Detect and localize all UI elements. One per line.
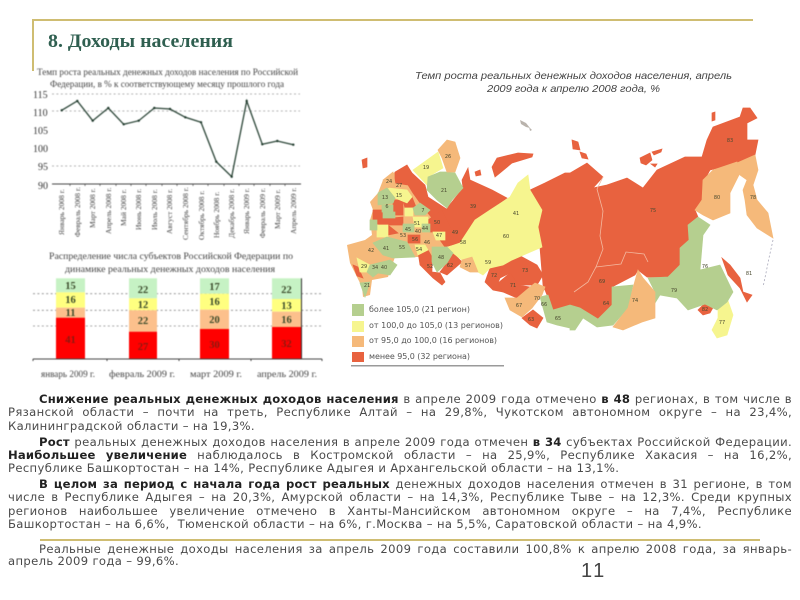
bar: April 2009: 16 [281, 315, 292, 326]
map: region numbers: 21 [441, 188, 447, 194]
y axis labels: 90 [38, 181, 48, 192]
body text: Калининградской области – на 19,3%. [8, 419, 255, 433]
map: region numbers: 69 [599, 279, 605, 285]
month labels: Май 2008 г. [119, 189, 128, 226]
paragraph: income decline [8, 392, 792, 433]
paragraph: income growth [8, 435, 792, 475]
map: region numbers: 47 [436, 233, 442, 239]
map: region numbers: 73 [522, 268, 528, 274]
line chart heading: Темп роста реальных денежных доходов населения по Российской [37, 67, 298, 77]
legend: below 95: менее 95,0 (32 региона) [369, 352, 470, 361]
map: region numbers [361, 138, 756, 326]
map: region numbers: 77 [719, 320, 725, 326]
map: region numbers: 46 [424, 240, 430, 246]
data line [60, 100, 294, 178]
y axis labels: 115 [33, 90, 48, 101]
map: region numbers: 26 [445, 154, 451, 160]
title: 8. Доходы населения [48, 31, 233, 52]
map: region numbers: 15 [396, 193, 402, 199]
map: region numbers: 52 [427, 264, 433, 270]
map: region numbers: 27 [396, 183, 402, 189]
map: region numbers: 72 [491, 273, 497, 279]
bar: January 2009: 41 [65, 335, 76, 346]
map: region numbers: 13 [382, 195, 388, 201]
map: region numbers: 60 [503, 234, 509, 240]
map: region numbers: 62 [447, 263, 453, 269]
body text: Снижение реальных денежных доходов населения в апреле 2009 года отмечено в 48 регионах, в том числе в [39, 392, 792, 406]
month labels: Февраль 2009 г. [258, 188, 267, 238]
legend: above 105 [352, 304, 470, 316]
map: region numbers: 76 [702, 264, 708, 270]
legend: 95 to 100: от 95,0 до 100,0 (16 регионов) [369, 336, 497, 345]
map: islands and outlines [520, 120, 773, 292]
bar: January 2009: 15 [65, 281, 76, 292]
bar: April 2009 [272, 278, 302, 359]
legend: above 105: более 105,0 (21 регион) [369, 305, 470, 314]
month labels: Июль 2008 г. [150, 189, 159, 230]
map: region numbers: 53 [400, 233, 406, 239]
map: region numbers: 41 [513, 211, 519, 217]
bar: February 2009 [129, 278, 157, 359]
month labels: Апрель 2008 г. [104, 187, 113, 234]
month labels: Март 2009 г. [273, 189, 282, 229]
bar chart categories: февраль 2009 г. [109, 369, 175, 380]
bar: February 2009: 22 [138, 285, 148, 296]
map: region numbers: 6 [385, 204, 389, 210]
month labels: Сентябрь 2008 г. [181, 187, 190, 240]
month labels: Март 2008 г. [88, 188, 97, 228]
map: region numbers: 45 [405, 227, 411, 233]
map: region numbers: 29 [361, 264, 367, 270]
map: region numbers: 55 [399, 245, 405, 251]
body text: В целом за период с начала года рост реальных денежных доходов населения отмечен в 31 регионе, в том [39, 477, 792, 491]
month labels: Февраль 2008 г. [73, 187, 82, 237]
body text: Наибольшее увеличение наблюдалось в Костромской области – на 25,9%, Республике Хакасия – на 16,2%, [8, 448, 792, 462]
map: region numbers: 44 [422, 226, 428, 232]
bar: March 2009: 17 [209, 282, 220, 293]
map: region numbers: 49 [452, 230, 458, 236]
map: region numbers: 66 [541, 302, 547, 308]
map: region numbers: 40 [415, 229, 421, 235]
month labels: Январь 2008 г. [57, 189, 66, 235]
map: region numbers: 34 [372, 265, 378, 271]
bar: January 2009: 16 [65, 295, 76, 306]
bar: February 2009: 22 [138, 316, 148, 327]
body text: Рост реальных денежных доходов населения в апреле 2009 года отмечен в 34 субъектах Российской Федерации. [39, 435, 792, 449]
map: region numbers: 75 [650, 208, 656, 214]
line chart heading: Федерации, в % к соответствующему месяцу прошлого года [50, 79, 284, 89]
map: region numbers: 40 [381, 265, 387, 271]
map: region numbers: 71 [510, 283, 516, 289]
map: region numbers: 59 [485, 260, 491, 266]
bar: April 2009: 13 [281, 301, 292, 312]
y axis labels: 100 [33, 144, 48, 155]
legend: 100 to 105: от 100,0 до 105,0 (13 регионов) [369, 321, 503, 330]
body text: апрель 2009 года – 99,6%. [8, 554, 179, 568]
month labels: Январь 2009 г. [242, 188, 251, 234]
body text: Рязанской области – почти на треть, Республике Алтай – на 29,8%, Чукотском автономном округе – на 23,4%, [8, 405, 792, 419]
map: region numbers: 39 [470, 204, 476, 210]
bar: March 2009 [200, 278, 229, 359]
paragraph: since start of year [8, 477, 792, 531]
bar chart heading [49, 251, 294, 274]
bar: February 2009: 27 [138, 342, 148, 353]
bar chart heading: динамике реальных денежных доходов населения [65, 264, 275, 274]
map: base of European Russia [347, 165, 452, 297]
body text: Республике Башкортостан – на 14%, Республике Адыгея и Архангельской области – на 13,1%. [8, 461, 619, 475]
bar: March 2009: 16 [209, 297, 220, 308]
map: region numbers: 63 [528, 317, 534, 323]
map: region numbers: 24 [386, 179, 392, 185]
map: region numbers: 51 [414, 221, 420, 227]
map: green regions [360, 172, 733, 330]
bar: January 2009 [56, 278, 85, 359]
y axis labels [33, 90, 48, 192]
body text: числе в Республике Адыгея – на 20,3%, Амурской области – на 14,3%, Республике Тыве – на 12,3%. Среди крупных [8, 490, 792, 504]
y axis labels: 95 [38, 162, 48, 173]
month labels: Ноябрь 2008 г. [212, 192, 221, 238]
map: region numbers: 74 [632, 298, 638, 304]
map: region numbers: 79 [671, 288, 677, 294]
map: region numbers: 7 [421, 208, 425, 214]
body text: Реальные денежные доходы населения за апрель 2009 года составили 100,8% к апрелю 2008 года, за январь- [39, 542, 792, 556]
map: region numbers: 82 [702, 307, 708, 313]
map: region numbers: 67 [516, 303, 522, 309]
map heading: Темп роста реальных денежных доходов населения, апрель [415, 70, 732, 82]
map: region numbers: 56 [412, 237, 418, 243]
map: region numbers: 81 [746, 271, 752, 277]
body text: регионов наибольшее увеличение отмечено в Ханты-Мансийском автономном округе – на 7,4%, Республике [8, 504, 792, 518]
map: region numbers: 78 [750, 195, 756, 201]
map: region numbers: 50 [434, 220, 440, 226]
map: region numbers: 83 [727, 138, 733, 144]
month labels: Август 2008 г. [165, 189, 174, 234]
line chart heading [37, 67, 298, 89]
map: region numbers: 58 [460, 240, 466, 246]
bar: April 2009: 22 [281, 285, 292, 296]
map: region numbers: 64 [603, 301, 609, 307]
bar chart axis [33, 359, 322, 361]
month labels: Апрель 2009 г. [289, 187, 298, 234]
bar chart gridlines [33, 294, 322, 326]
bar: January 2009: 11 [66, 308, 75, 319]
map: orange regions [383, 140, 773, 330]
y axis labels: 105 [33, 126, 48, 137]
page number: 11 [581, 560, 605, 582]
y axis labels: 110 [33, 108, 48, 119]
bar chart categories: март 2009 г. [190, 370, 242, 380]
map: region numbers: 41 [383, 246, 389, 252]
map: yellow regions [357, 152, 733, 338]
bar chart heading: Распределение числа субъектов Российской Федерации по [49, 251, 294, 261]
gridlines and axis [52, 94, 301, 186]
bar: March 2009: 20 [209, 315, 220, 326]
map: region numbers: 21 [364, 283, 370, 289]
bar: February 2009: 12 [138, 300, 148, 311]
bar: April 2009: 32 [281, 339, 292, 350]
month labels: Октябрь 2008 г. [197, 190, 206, 240]
map: region numbers: 80 [714, 195, 720, 201]
map: region numbers: 54 [416, 247, 422, 253]
map: red regions [353, 108, 758, 328]
bar chart categories [41, 369, 317, 380]
map heading: 2009 года к апрелю 2008 года, % [486, 83, 660, 95]
map: region numbers: 70 [534, 296, 540, 302]
map: region numbers: 48 [438, 255, 444, 261]
month labels [57, 187, 298, 240]
month labels: Июнь 2008 г. [134, 189, 143, 230]
bar chart categories: январь 2009 г. [41, 370, 95, 380]
map: region numbers: 42 [368, 248, 374, 254]
map: region numbers: 57 [465, 263, 471, 269]
body text: Башкортостан – на 6,6%, Тюменской области – на 6%, г.Москва – на 5,5%, Саратовской области – на 4,9%. [8, 517, 702, 531]
map: region numbers: 19 [423, 165, 429, 171]
map: region numbers: 65 [555, 316, 561, 322]
paragraph: summary [8, 542, 792, 568]
month labels: Декабрь 2008 г. [227, 189, 236, 238]
bar: March 2009: 30 [209, 340, 220, 351]
bar chart categories: апрель 2009 г. [257, 370, 317, 380]
